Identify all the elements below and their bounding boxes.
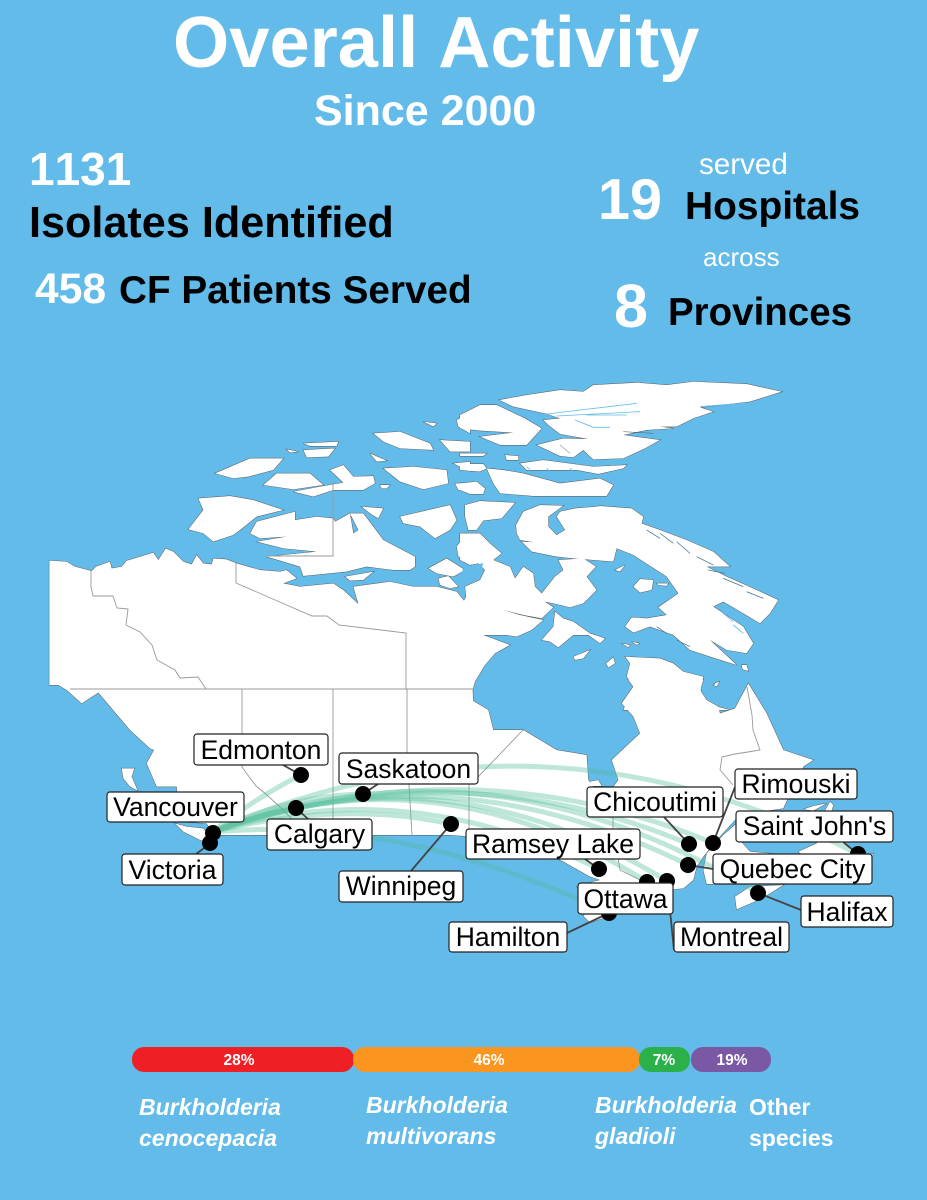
inlet near Boothia [460,563,483,583]
segment: 7% [639,1047,690,1072]
segment: 19% [691,1047,771,1072]
stat: hospitals served: 19 [598,168,662,232]
provincial borders [70,482,760,880]
stat: provinces: across [703,242,780,272]
segment: 46% [353,1047,640,1072]
label: Winnipeg: Winnipeg [346,871,456,901]
legend: Burkholderia multivorans: multivorans [366,1123,496,1149]
label: Ramsey Lake: Ramsey Lake [472,829,634,859]
segment: 28% [132,1047,354,1072]
legend: Burkholderia cenocepacia: Burkholderia [139,1094,281,1120]
segment: 7%: 7% [653,1052,675,1069]
map of Canada [49,382,873,923]
label: Montreal: Montreal [680,922,783,952]
subtitle: Since 2000 [314,87,536,135]
stat: provinces: Provinces [668,291,852,334]
legend: Burkholderia gladioli: Burkholderia [595,1092,737,1118]
segment: 46%: 46% [473,1052,505,1069]
legend: Other species: Other [749,1094,810,1120]
legend: Other species [749,1094,833,1151]
label: Edmonton: Edmonton [201,735,321,765]
label: Vancouver: Vancouver [113,792,238,822]
label: Victoria: Victoria [129,855,217,885]
stat: provinces [614,242,852,340]
segment: 19%: 19% [716,1052,748,1069]
stat: isolates identified: Isolates Identified [29,199,394,247]
label: Quebec City: Quebec City [720,854,866,884]
label: Hamilton: Hamilton [456,922,560,952]
label: Halifax: Halifax [806,897,888,927]
coastline texture [560,432,763,647]
stat: CF patients served: 458 [35,265,106,313]
segment: 28%: 28% [223,1052,255,1069]
legend: Burkholderia gladioli [594,1092,737,1149]
legend: Burkholderia cenocepacia [139,1094,281,1151]
stat: hospitals served [598,148,860,232]
city dots [202,767,866,921]
fjords on Baffin and Ellesmere [527,403,763,647]
stat: hospitals served: served [699,148,788,181]
legend: Burkholderia multivorans [366,1092,508,1149]
stat: hospitals served: Hospitals [685,185,860,228]
label: Calgary: Calgary [274,819,366,849]
land outline [49,382,873,923]
label: Saint John's: Saint John's [743,811,886,841]
legend: Burkholderia multivorans: Burkholderia [366,1092,508,1118]
legend: Burkholderia cenocepacia: cenocepacia [139,1125,277,1151]
title: Overall Activity [173,3,699,83]
label leader lines [196,765,858,950]
legend: Other species: species [749,1125,833,1151]
stat: isolates identified [29,143,394,247]
stat: provinces: 8 [614,272,648,340]
land fill [49,382,873,923]
label: Ottawa: Ottawa [584,884,668,914]
flow arcs from Vancouver [212,766,858,913]
label: Saskatoon: Saskatoon [346,754,471,784]
legend: Burkholderia gladioli: gladioli [594,1123,676,1149]
species proportion bar [132,1047,771,1072]
stat: isolates identified: 1131 [29,143,131,195]
label: Chicoutimi: Chicoutimi [593,787,717,817]
stat: CF patients served: CF Patients Served [119,269,472,312]
label: Rimouski: Rimouski [742,769,850,799]
